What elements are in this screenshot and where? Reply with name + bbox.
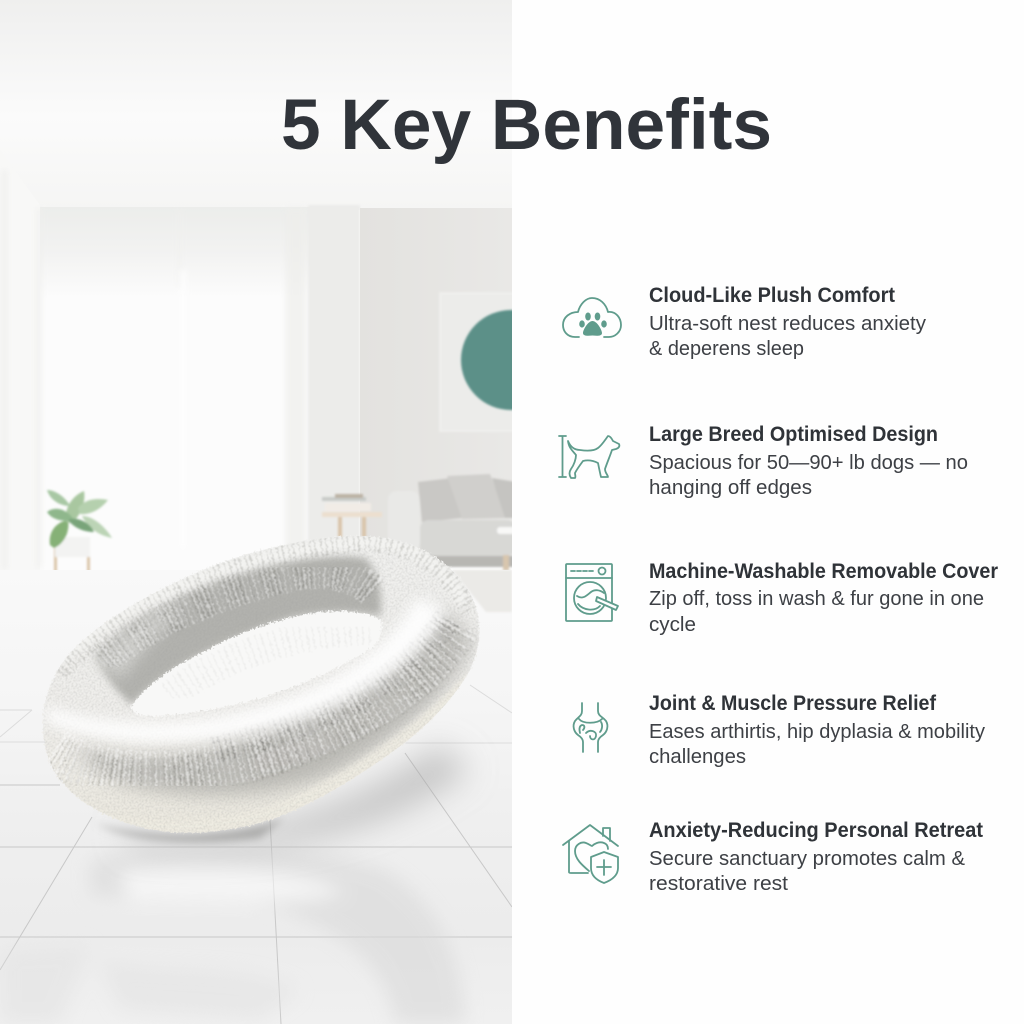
heading 2: Large Breed Optimised Design — [649, 423, 938, 446]
description 3: Zip off, toss in wash & fur gone in one — [649, 588, 984, 610]
heading 4: Joint & Muscle Pressure Relief — [649, 692, 937, 715]
front rim highlight — [46, 598, 445, 743]
benefit 3 — [566, 560, 998, 636]
icon: cloud with paw — [563, 298, 621, 337]
icon: large dog with height ruler — [559, 436, 619, 478]
description 1: & deperens sleep — [649, 338, 804, 360]
benefit 2 — [559, 423, 968, 499]
left side wall — [0, 207, 40, 236]
side table with books — [322, 494, 382, 537]
plush donut bed — [30, 525, 490, 840]
wall fur hairs — [55, 618, 460, 778]
fur grain — [43, 538, 480, 832]
outer wall shade — [75, 610, 472, 795]
cushion fur speckle — [170, 630, 372, 695]
description 5: Secure sanctuary promotes calm & — [649, 848, 966, 870]
heading 3: Machine-Washable Removable Cover — [649, 560, 998, 583]
benefit 5 — [563, 819, 983, 895]
sofa — [418, 474, 512, 570]
description 4: Eases arthirtis, hip dyplasia & mobility — [649, 721, 985, 743]
benefit 1 — [563, 284, 926, 360]
bed reflection on floor — [90, 848, 465, 1024]
inner wall light band — [98, 607, 179, 680]
description 1: Ultra-soft nest reduces anxiety — [649, 313, 926, 335]
description 2: Spacious for 50—90+ lb dogs — no — [649, 452, 968, 474]
floor — [0, 570, 512, 1024]
top rim fur hairs — [60, 542, 470, 672]
bottom cream edge — [132, 686, 459, 832]
heading 5: Anxiety-Reducing Personal Retreat — [649, 819, 983, 842]
description 4: challenges — [649, 746, 746, 768]
potted plant — [47, 490, 112, 572]
inner cushion — [131, 611, 382, 716]
panel: benefit list — [559, 284, 998, 895]
icon: washing machine — [566, 564, 618, 621]
inner wall fur hairs — [100, 572, 374, 662]
heading 1: Cloud-Like Plush Comfort — [649, 284, 895, 307]
description 2: hanging off edges — [649, 477, 812, 499]
floor tile grid — [0, 685, 512, 1024]
description 5: restorative rest — [649, 873, 788, 895]
marble floor veining — [2, 954, 280, 1002]
bed shading — [43, 536, 480, 832]
bed shadow — [120, 745, 470, 849]
back wall — [360, 208, 512, 560]
inner wall — [95, 556, 381, 705]
rug — [452, 570, 512, 612]
ceiling — [0, 0, 512, 210]
bed outer body — [43, 536, 480, 832]
top back rim — [62, 541, 465, 660]
curtain wall — [40, 207, 308, 272]
description 3: cycle — [649, 614, 696, 636]
curtain folds — [288, 273, 304, 544]
icon: joint — [574, 703, 607, 752]
wall art teal circle — [460, 308, 512, 412]
icon: house with heart and shield — [563, 825, 618, 883]
benefit 4 — [574, 692, 985, 768]
title: 5 Key Benefits — [281, 86, 772, 165]
panel: living room photo — [0, 0, 561, 1024]
wall art frame — [440, 293, 468, 430]
pillar — [308, 205, 360, 570]
